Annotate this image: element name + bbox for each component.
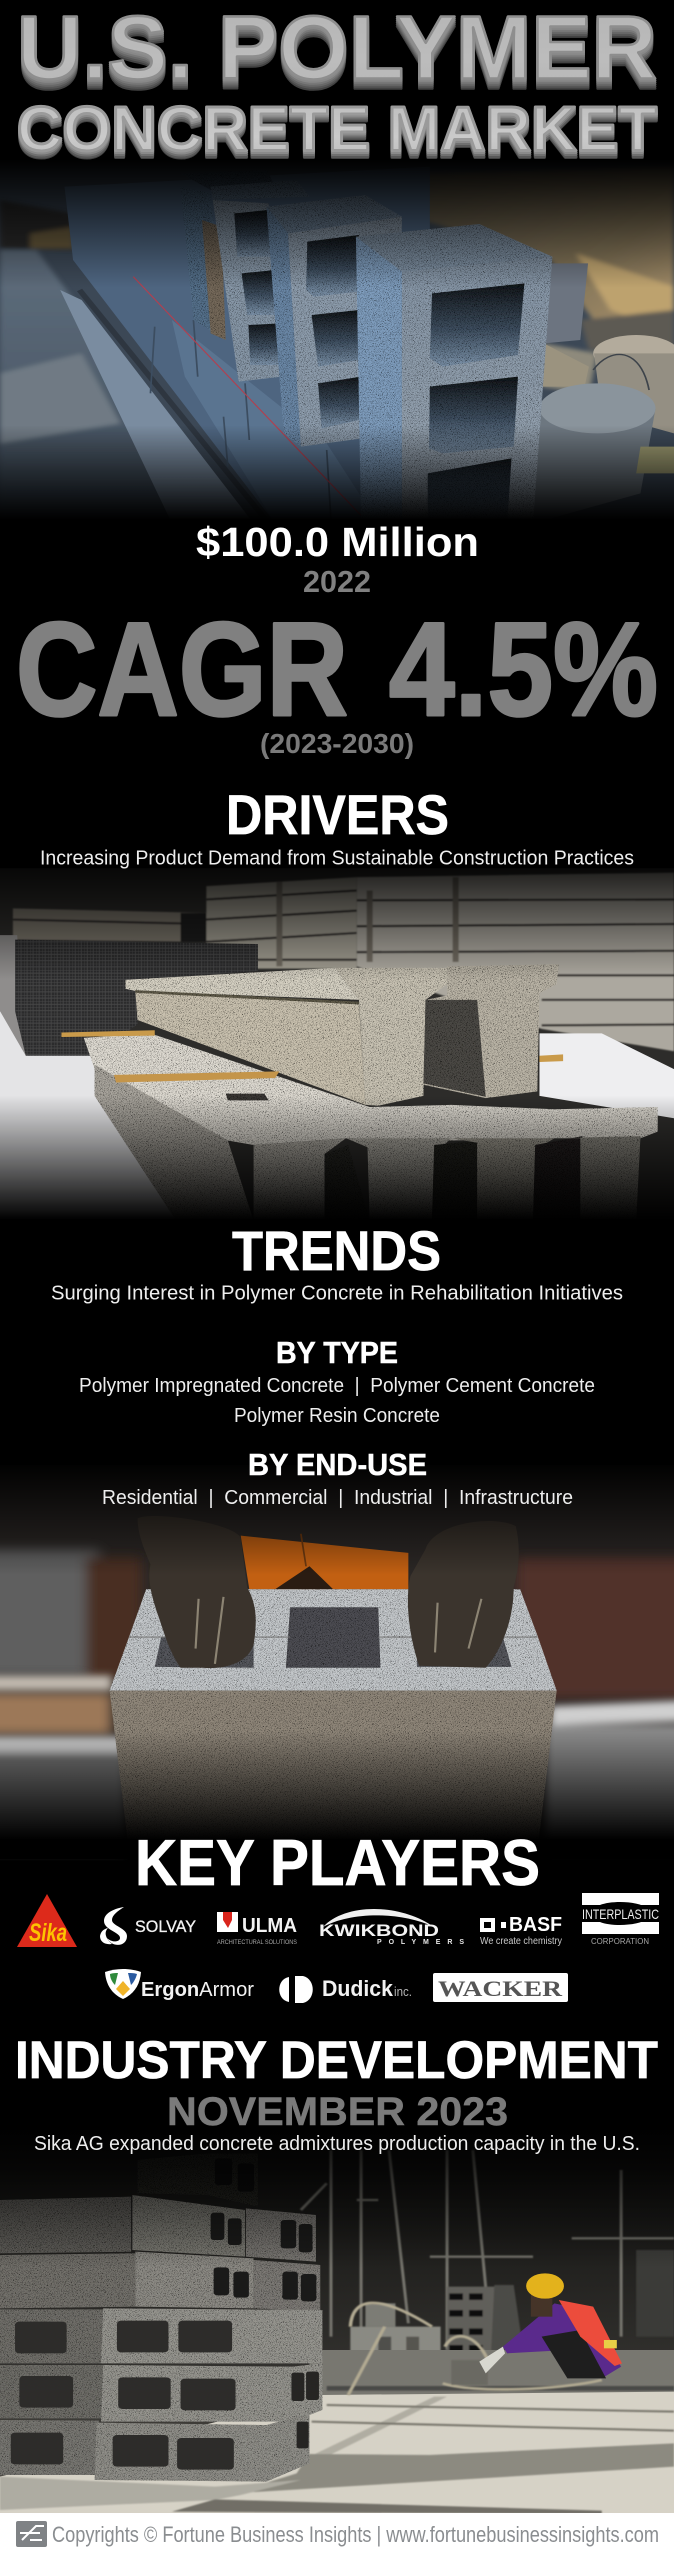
- photo: concrete block wall: [0, 160, 674, 523]
- title line 1: U.S. POLYMER: [17, 0, 657, 98]
- market size value: $100.0 Million: [196, 519, 479, 565]
- logo: Dudick: [279, 1976, 412, 2003]
- logo: Solvay: SOLVAY: [135, 1917, 196, 1936]
- logo: Dudick: Dudick: [322, 1976, 394, 2001]
- logo: ULMA: ARCHITECTURAL SOLUTIONS: [217, 1940, 297, 1946]
- development date: NOVEMBER 2023: [167, 2090, 508, 2134]
- logo: BASF: [480, 1914, 562, 1947]
- logo: Interplastic: CORPORATION: [591, 1937, 649, 1946]
- logo: ErgonArmor: ErgonArmor: [141, 1979, 254, 2001]
- photo fade: block stacks: [0, 2118, 674, 2268]
- logo: KwikBond Polymers: POLYMERS: [377, 1939, 464, 1946]
- photo fades: hands lifting block: [0, 1460, 674, 1859]
- logo: Sika: Sika: [29, 1919, 67, 1947]
- logo: KwikBond Polymers: [319, 1909, 464, 1946]
- heading: by type: BY TYPE: [276, 1335, 398, 1370]
- title line 2: CONCRETE MARKET: [17, 94, 657, 164]
- logo: Interplastic: [582, 1893, 659, 1946]
- footer: [0, 2513, 674, 2553]
- logo: Sika: [17, 1894, 77, 1947]
- photo fades: concrete block wall: [0, 0, 674, 531]
- heading: drivers: DRIVERS: [226, 783, 449, 846]
- logo: KwikBond Polymers: KWIKBOND: [319, 1921, 439, 1940]
- by end-use list: Residential | Commercial | Industrial | Infrastructure: [102, 1487, 573, 1509]
- photo: block stacks and construction worker: [0, 2130, 674, 2514]
- by type list line 1: Polymer Impregnated Concrete | Polymer Cement Concrete: [79, 1375, 595, 1397]
- title: [17, 0, 657, 164]
- heading: by end-use: BY END-USE: [248, 1447, 427, 1482]
- trends text: Surging Interest in Polymer Concrete in Rehabilitation Initiatives: [51, 1282, 623, 1304]
- logo: Wacker: [433, 1973, 568, 2002]
- logo: BASF: BASF: [509, 1914, 562, 1936]
- logo: Wacker: WACKER: [438, 1976, 563, 2001]
- logo: Dudick: inc.: [394, 1984, 412, 1999]
- heading: trends: TRENDS: [232, 1219, 441, 1282]
- market size year: 2022: [303, 564, 371, 599]
- heading: key players: KEY PLAYERS: [135, 1826, 540, 1899]
- icon: Fortune Business Insights logo: [16, 2521, 47, 2547]
- logo: ULMA: [217, 1912, 297, 1946]
- logo: Solvay: [100, 1907, 196, 1945]
- logo: ErgonArmor: [105, 1969, 254, 2001]
- by type list line 2: Polymer Resin Concrete: [234, 1405, 440, 1427]
- CAGR figure: CAGR: [16, 596, 348, 744]
- photo: precast concrete beams in snow: [0, 868, 674, 1221]
- photo: hands lifting a concrete block: [0, 1465, 674, 1853]
- logo: ULMA: ULMA: [242, 1915, 297, 1937]
- logo: BASF: We create chemistry: [480, 1936, 562, 1947]
- development text: Sika AG expanded concrete admixtures production capacity in the U.S.: [34, 2133, 640, 2155]
- drivers text: Increasing Product Demand from Sustainable Construction Practices: [40, 848, 634, 870]
- photo fades: precast beams: [0, 845, 674, 1229]
- CAGR period: (2023-2030): [260, 728, 414, 759]
